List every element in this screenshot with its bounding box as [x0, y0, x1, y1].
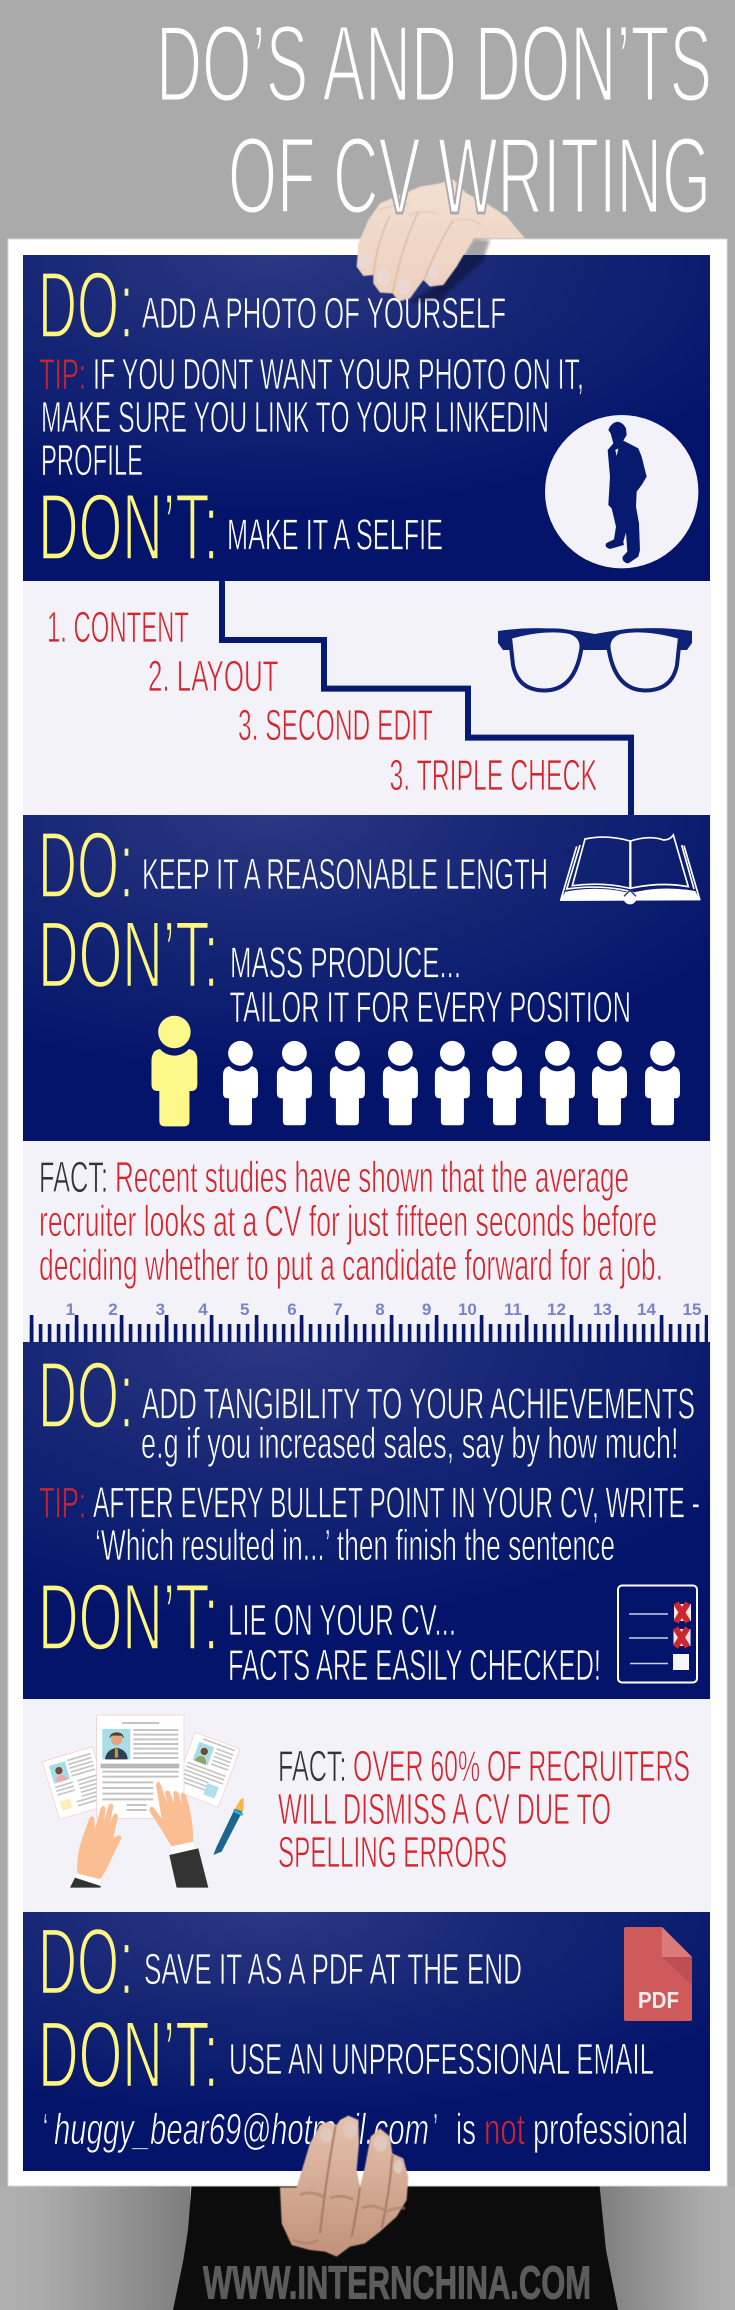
fact: spelling errors: SPELLING ERRORS: [278, 1829, 507, 1877]
stepped line: [222, 581, 631, 815]
ruler numbers: 8: [375, 1300, 385, 1319]
background shading right: [598, 2186, 735, 2310]
don't heading: DON’T:: [38, 474, 219, 580]
icon: checklist: [618, 1586, 697, 1682]
icon: row of white people: [223, 1041, 680, 1125]
fact: fifteen seconds: FACT:: [39, 1154, 108, 1202]
background shading left: [0, 2186, 190, 2310]
icon: silhouette in circle: [545, 415, 698, 568]
fact: spelling errors: FACT:: [278, 1743, 346, 1791]
hand bottom: [280, 2116, 408, 2257]
ruler numbers: 11: [504, 1300, 522, 1319]
email example: is: [456, 2106, 476, 2154]
tip text: [93, 1479, 700, 1570]
list: four editing steps: [47, 604, 597, 800]
hand top: [357, 179, 525, 303]
pen: [213, 1798, 244, 1855]
panel: tangibility: [23, 1342, 710, 1699]
ruler numbers: 9: [422, 1300, 431, 1319]
do heading: DO:: [38, 252, 134, 358]
tip text: [41, 351, 584, 485]
icon: glasses: [498, 628, 692, 690]
don't text: MASS PRODUCE...: [230, 940, 461, 988]
do heading: DO:: [38, 1909, 134, 2015]
ruler numbers: 14: [637, 1300, 656, 1319]
person torso holding poster: [173, 2180, 618, 2310]
ruler numbers: 3: [156, 1300, 165, 1319]
left paper: [42, 1747, 110, 1820]
left hand: [70, 1804, 122, 1888]
panel: reasonable length: [23, 813, 710, 1141]
do text: [141, 1381, 695, 1468]
tip label: TIP:: [39, 351, 86, 399]
ruler numbers: [66, 1300, 701, 1319]
centre paper: [97, 1715, 184, 1818]
tip label: TIP:: [39, 1479, 86, 1527]
do heading: DO:: [38, 1342, 134, 1448]
right paper: [173, 1732, 240, 1807]
panel: add a photo: [23, 252, 710, 581]
ruler numbers: 4: [198, 1300, 208, 1319]
don't heading: DON’T:: [38, 2002, 219, 2108]
ruler numbers: 5: [240, 1300, 249, 1319]
don't text: [230, 940, 631, 1032]
ruler: [30, 1300, 708, 1333]
icon: pdf file: [624, 1927, 692, 2021]
title: [156, 3, 712, 237]
email example: not: [484, 2106, 525, 2154]
list: four editing steps: 2. LAYOUT: [148, 653, 278, 701]
icon: open book: [560, 835, 700, 904]
email example: huggy_bear69@hotmail.com: [54, 2106, 429, 2154]
illustration: CVs and hands: [42, 1715, 244, 1888]
nails: [320, 2122, 403, 2173]
fact: fifteen seconds: [39, 1154, 663, 1290]
list: four editing steps: 3. SECOND EDIT: [238, 702, 433, 750]
do heading: DO:: [38, 813, 134, 919]
ruler numbers: 7: [333, 1300, 343, 1319]
don't text: LIE ON YOUR CV...: [228, 1597, 456, 1645]
fact: spelling errors: [278, 1743, 690, 1877]
panel: light background: [23, 581, 711, 1913]
panel: save as pdf: [23, 1909, 710, 2171]
icon: pdf file: PDF: [638, 1987, 679, 2013]
ruler numbers: 10: [458, 1300, 477, 1319]
nails: [359, 254, 438, 295]
don't text: MAKE IT A SELFIE: [227, 512, 443, 560]
don't heading: DON’T:: [38, 1564, 219, 1670]
right hand: [149, 1782, 208, 1888]
ruler numbers: 13: [593, 1300, 612, 1319]
ruler numbers: 2: [108, 1300, 118, 1319]
ruler numbers: 15: [683, 1300, 701, 1319]
email example: ‘: [43, 2106, 48, 2154]
ruler numbers: 6: [287, 1300, 297, 1319]
email example: ’: [433, 2106, 438, 2154]
tip text: PROFILE: [41, 437, 143, 485]
list: four editing steps: 1. CONTENT: [47, 604, 189, 652]
ruler numbers: 12: [547, 1300, 566, 1319]
don't text: [228, 1597, 601, 1690]
icon: yellow standout person: [151, 1016, 197, 1126]
ruler numbers: 1: [66, 1300, 75, 1319]
don't heading: DON’T:: [38, 902, 219, 1008]
